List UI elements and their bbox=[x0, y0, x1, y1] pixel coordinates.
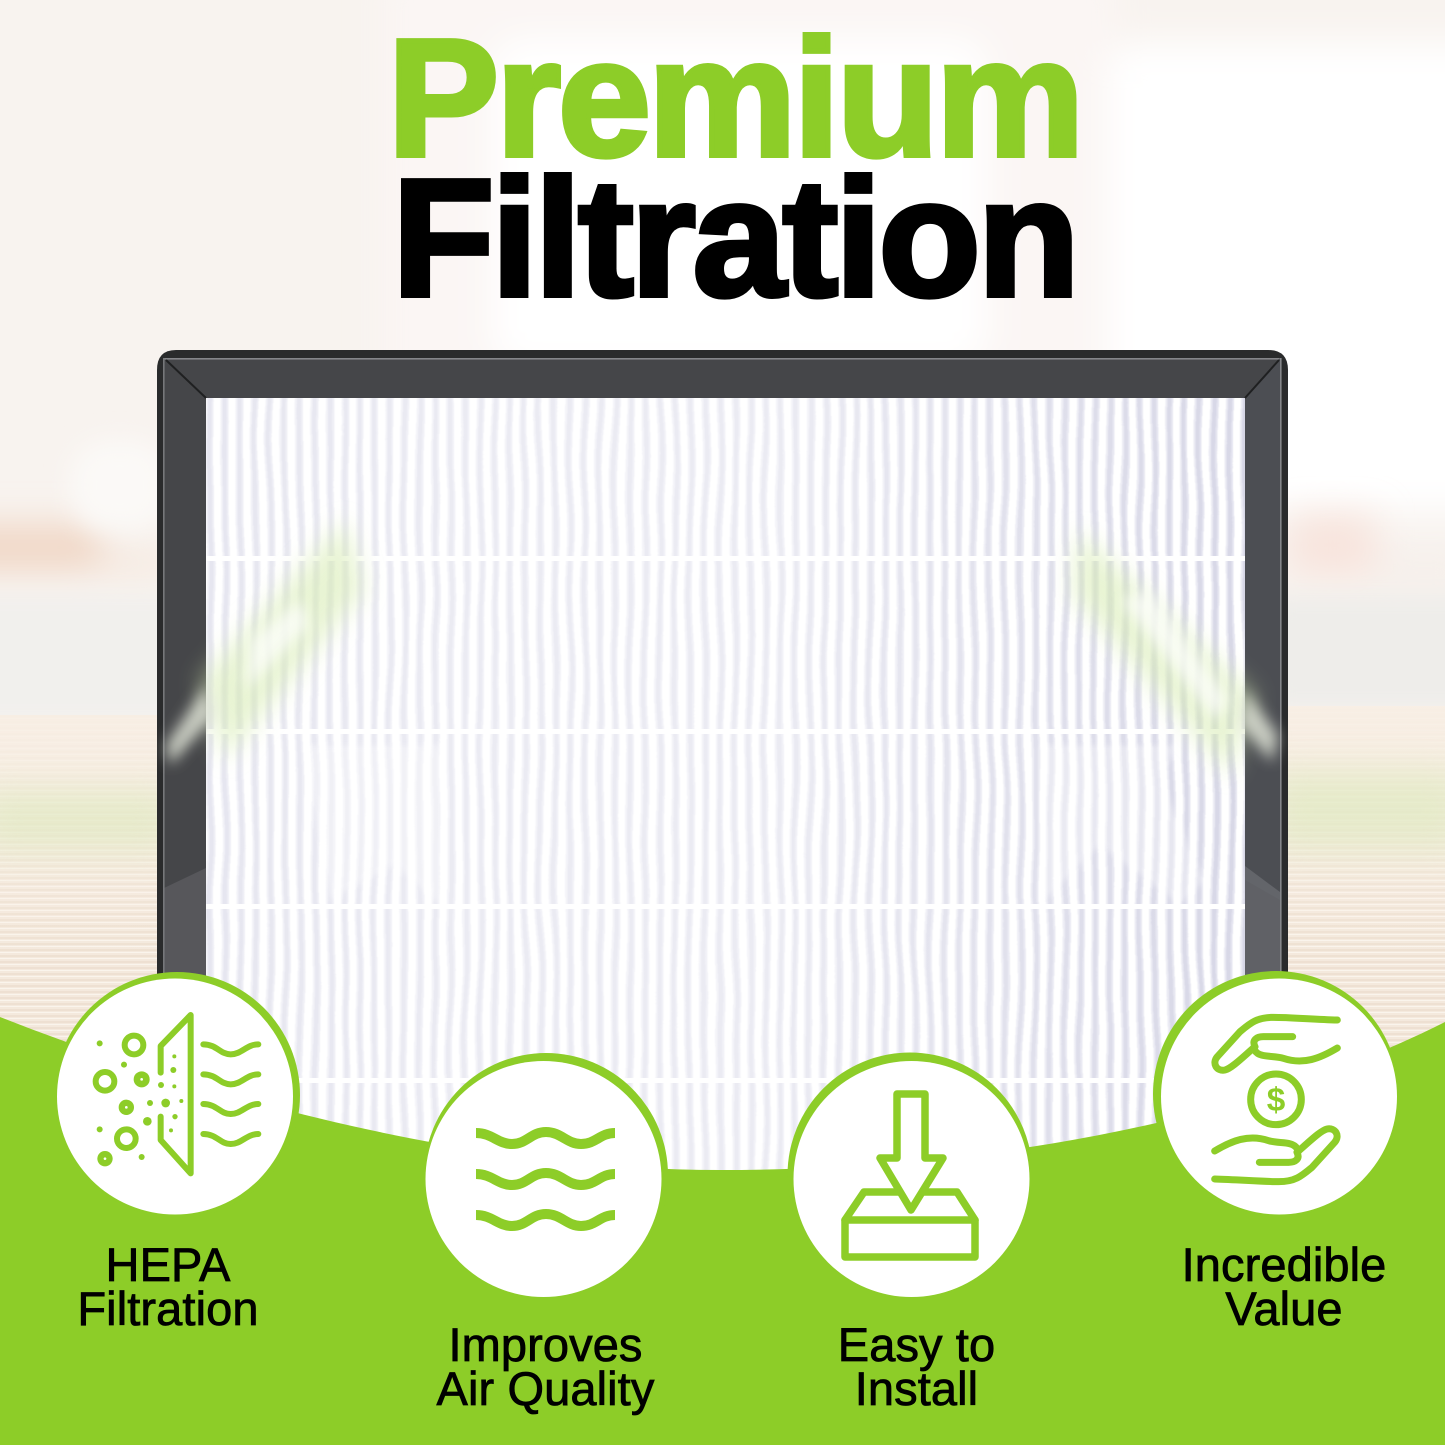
title bbox=[388, 6, 1081, 332]
label: Install bbox=[855, 1362, 978, 1415]
feature: HEPA Filtration bbox=[54, 972, 300, 1335]
feature: Improves Air Quality bbox=[424, 1053, 668, 1415]
label: Incredible bbox=[1182, 1238, 1386, 1291]
pleated filter media bbox=[196, 388, 1256, 1208]
label: Easy to bbox=[838, 1318, 995, 1371]
label: Filtration bbox=[77, 1282, 259, 1335]
filter frame bbox=[157, 350, 1288, 1200]
badge circle bbox=[788, 1052, 1032, 1298]
label: Air Quality bbox=[437, 1362, 655, 1415]
glue lines bbox=[206, 556, 1245, 1083]
feature: Incredible Value bbox=[1153, 971, 1399, 1335]
green wave band bbox=[0, 1017, 1445, 1445]
label: Value bbox=[1225, 1282, 1343, 1335]
icon: arrow into filter box bbox=[845, 1094, 975, 1257]
badge circle bbox=[1153, 971, 1399, 1217]
green haze on the table bbox=[0, 770, 1445, 850]
wood table bbox=[0, 706, 1445, 1060]
icon: hands protecting coin: $ bbox=[1267, 1082, 1286, 1119]
lighter reflection patches bbox=[1048, 746, 1201, 900]
title line: Filtration: Filtration bbox=[392, 146, 1077, 332]
icon: air waves bbox=[476, 1132, 615, 1226]
label: Improves bbox=[448, 1318, 643, 1371]
feature: Easy to Install bbox=[788, 1052, 1032, 1415]
title line: Premium: Premium bbox=[388, 6, 1081, 192]
badge circle bbox=[54, 972, 300, 1218]
badge circle bbox=[424, 1053, 668, 1297]
icon: hands protecting coin bbox=[1215, 1017, 1337, 1182]
air flow streak: right bbox=[1072, 530, 1278, 775]
icon: particles passing through filter bbox=[96, 1015, 258, 1173]
label: HEPA bbox=[106, 1238, 231, 1291]
air flow streak: left bbox=[166, 520, 365, 765]
